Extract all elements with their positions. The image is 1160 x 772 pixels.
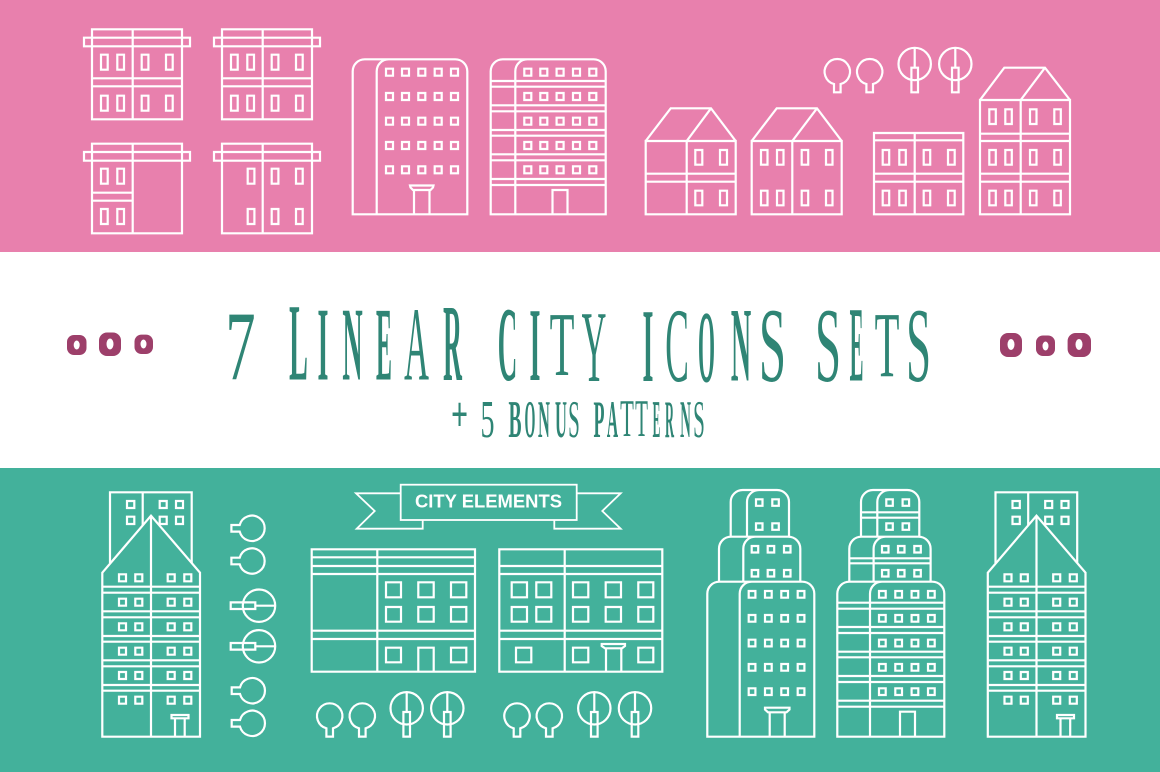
subtitle: B xyxy=(508,391,522,449)
subtitle: S xyxy=(693,390,705,449)
panel: teal city icons xyxy=(102,485,1086,737)
icon: wide building with canopy door xyxy=(499,549,662,672)
subtitle: S xyxy=(568,390,580,449)
title: O xyxy=(698,292,715,405)
icon: tall gabled apartment, left xyxy=(102,492,200,737)
title: S xyxy=(906,286,931,404)
title: T xyxy=(550,295,574,396)
subtitle: R xyxy=(665,392,674,449)
subtitle: A xyxy=(607,392,618,449)
icon: right row of four trees xyxy=(504,692,651,737)
subtitle: E xyxy=(653,391,660,449)
icon: flat building with roof band, top right xyxy=(214,29,320,119)
title: N xyxy=(731,286,751,404)
title: S xyxy=(759,286,786,404)
icon: stepped skyscraper with floor bands xyxy=(837,490,944,737)
pink background band xyxy=(0,0,1160,252)
icon: left row of four trees xyxy=(317,692,463,737)
subtitle: U xyxy=(555,391,567,449)
icon: tall gabled house xyxy=(980,68,1070,214)
icon: sideways trees column xyxy=(231,516,275,736)
icon: tall gabled apartment, right xyxy=(988,492,1086,737)
icon: gabled house with four window columns xyxy=(752,108,842,214)
title: E xyxy=(376,287,392,403)
banner label: CITY ELEMENTS xyxy=(415,490,562,512)
subtitle xyxy=(451,386,705,449)
subtitle: + xyxy=(451,386,468,442)
title: I xyxy=(530,286,540,403)
title: T xyxy=(875,293,899,397)
title: C xyxy=(498,285,517,403)
title: Y xyxy=(582,291,606,404)
subtitle: N xyxy=(538,391,550,449)
banner: city elements xyxy=(356,485,621,529)
icon: flat-roof town house xyxy=(874,133,963,214)
title: R xyxy=(443,284,462,405)
title: S xyxy=(815,287,841,404)
icon: flat building with roof band, top left xyxy=(84,29,190,119)
icon: row of four trees xyxy=(825,48,972,92)
subtitle: T xyxy=(620,389,634,448)
icon: gabled house with blank left wing xyxy=(646,108,736,214)
title xyxy=(225,282,931,405)
title: I xyxy=(643,287,653,404)
title: 7 xyxy=(225,291,256,401)
subtitle: O xyxy=(525,392,535,449)
icon: building with three window columns xyxy=(214,144,320,233)
title: L xyxy=(289,282,308,404)
icon: stepped skyscraper xyxy=(707,490,814,737)
subtitle: T xyxy=(635,389,648,448)
title: E xyxy=(850,285,863,404)
icon: building with blank right wing xyxy=(84,144,190,233)
subtitle: P xyxy=(594,392,604,449)
teal background band xyxy=(0,468,1160,772)
title: N xyxy=(342,285,363,403)
subtitle: 5 xyxy=(481,392,494,449)
decoration: left trio of dots xyxy=(67,332,153,356)
icon: wide building with blank wing xyxy=(312,549,475,672)
icon: rounded office tower xyxy=(353,59,467,214)
title: C xyxy=(665,288,689,405)
subtitle: N xyxy=(680,392,691,449)
panel: pink city icons xyxy=(84,29,1070,233)
decoration: right trio of dots xyxy=(1000,333,1091,357)
icon: rounded office tower with floor bands xyxy=(491,59,606,214)
title: A xyxy=(404,285,429,402)
title: I xyxy=(318,285,328,403)
